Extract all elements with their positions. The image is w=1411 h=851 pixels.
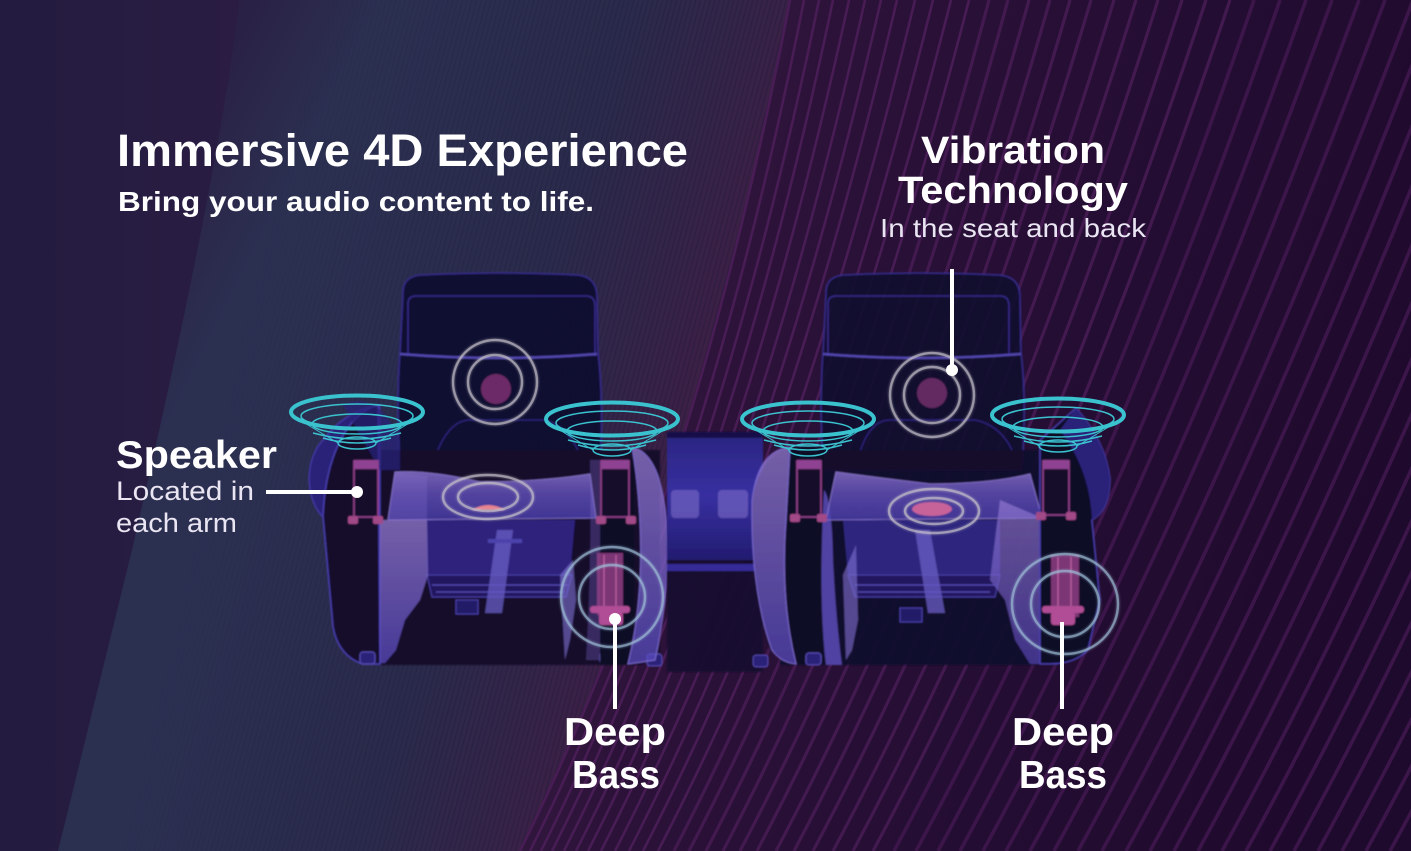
label: speaker: Located in [116, 476, 254, 506]
feet [753, 655, 768, 667]
right gear panel [560, 560, 576, 660]
bass rings [561, 547, 1118, 654]
subtitle: Bring your audio content to life. [118, 186, 594, 217]
label: vibration technology: Technology [898, 170, 1128, 212]
back vibration motor [917, 378, 947, 408]
outer left arm [309, 405, 380, 664]
label: vibration technology [880, 130, 1147, 243]
left arm of right seat [752, 447, 824, 664]
leader: right deep bass [1060, 622, 1064, 709]
seat cushion [826, 472, 1042, 520]
right panel of right seat [990, 500, 1042, 664]
label: vibration technology: Vibration [921, 130, 1105, 172]
illustration: right theater seat [752, 273, 1110, 667]
label: left deep bass [564, 711, 666, 797]
outer right arm [1040, 408, 1110, 664]
rings: left seat [443, 475, 533, 519]
cup holders [671, 490, 748, 518]
feet [360, 652, 375, 664]
leader: speaker [266, 486, 363, 498]
back vibration motor [481, 374, 511, 404]
label: speaker: each arm [116, 508, 237, 538]
illustration: center console [667, 432, 763, 672]
rings: left back [453, 340, 537, 424]
icon: speaker cone 3 [742, 402, 874, 456]
bass driver [590, 553, 630, 625]
label: left deep bass: Bass [572, 754, 660, 797]
leader: left deep bass [609, 613, 621, 709]
rings: right back [890, 353, 974, 437]
seat lower body [378, 450, 660, 665]
icon: speaker cone 1 [291, 396, 423, 449]
right arm speaker column [1036, 460, 1076, 520]
seat back [821, 273, 1024, 470]
strut [485, 530, 513, 613]
left panel [380, 520, 428, 663]
illustration: left theater seat [309, 273, 668, 666]
label: left deep bass: Deep [564, 711, 666, 754]
right arm of left seat [586, 460, 600, 660]
right arm speaker column [596, 460, 636, 524]
left arm speaker column [348, 460, 383, 524]
seat cushion [388, 472, 596, 520]
label: speaker [116, 434, 277, 538]
headrest [408, 296, 595, 356]
vibration rings [443, 340, 979, 533]
back band [400, 354, 597, 358]
seat front [843, 520, 1000, 575]
title: Immersive 4D Experience [117, 125, 688, 176]
label: right deep bass: Bass [1019, 754, 1107, 797]
seat lower body [780, 450, 1060, 665]
label: right deep bass [1012, 711, 1114, 797]
rings: right seat [889, 489, 979, 533]
rings: left bass [561, 547, 663, 647]
seat vibration motor [472, 505, 505, 510]
strut [915, 530, 945, 613]
label: speaker: Speaker [116, 434, 277, 477]
seat vibration motor [912, 502, 952, 516]
leader: vibration [946, 269, 958, 376]
headrest [828, 296, 1009, 356]
label: right deep bass: Deep [1012, 711, 1114, 754]
icon: speaker cone 4 [992, 398, 1124, 452]
seat front [427, 520, 575, 575]
icon: speaker cone 2 [546, 402, 678, 456]
left arm speaker column [790, 460, 827, 522]
back band [823, 354, 1021, 358]
rings: right bass [1012, 554, 1118, 654]
label: vibration technology: In the seat and back [880, 213, 1147, 243]
bass driver [1042, 555, 1084, 625]
seat back [398, 273, 602, 470]
